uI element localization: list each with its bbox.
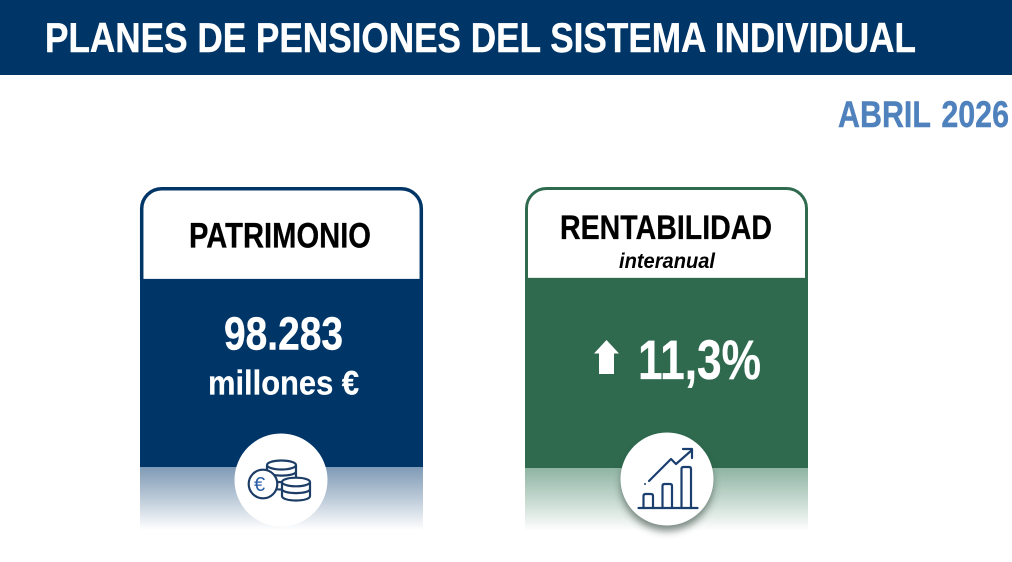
- icon: euro coins: [234, 434, 328, 526]
- panel header box: [142, 189, 421, 280]
- icon: growth chart: [620, 432, 714, 531]
- panel reflection: [140, 467, 423, 530]
- panel body: [525, 278, 808, 468]
- subheading: interanual: interanual: [619, 250, 716, 273]
- panel: rentabilidad: [525, 188, 808, 531]
- value: 11,3%: 11,3%: [638, 328, 761, 391]
- panel header box: [526, 188, 806, 279]
- heading: patrimonio: PATRIMONIO: [189, 216, 371, 256]
- unit: millones: millones €: [208, 364, 359, 402]
- header banner: [0, 0, 1012, 75]
- value: 98.283: 98.283: [224, 308, 343, 360]
- heading: rentabilidad: RENTABILIDAD: [560, 209, 772, 247]
- panel reflection: [525, 468, 808, 531]
- panel body: [140, 279, 423, 467]
- icon: up arrow: [594, 340, 619, 374]
- euro sign: €: [254, 474, 265, 496]
- panel: patrimonio: [140, 189, 423, 530]
